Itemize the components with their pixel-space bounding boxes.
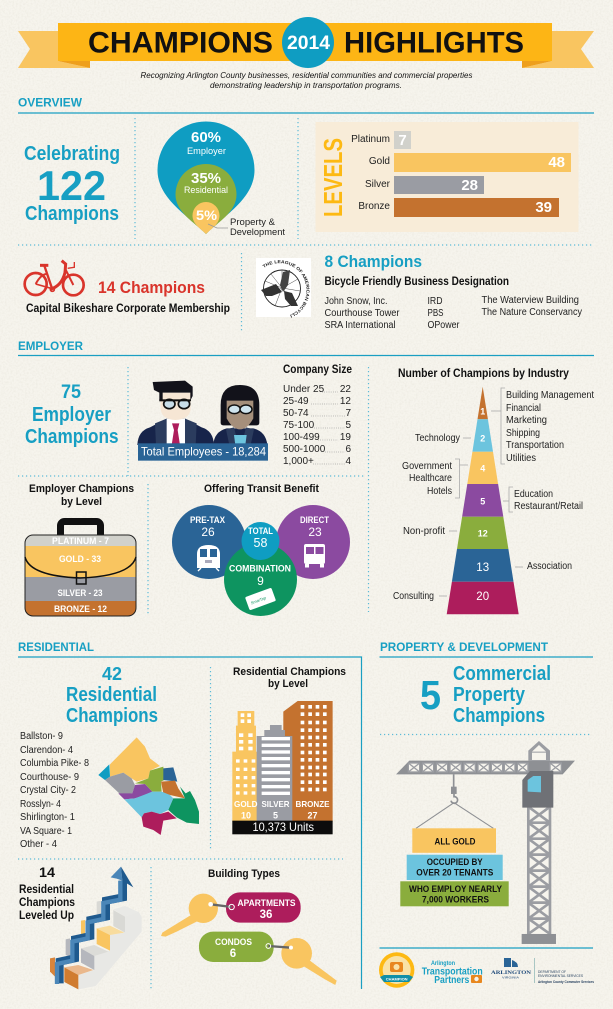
chart: champions by industry pyramid: Government <box>402 461 452 472</box>
icon: briefcase levels: SILVER - 23 <box>58 588 102 598</box>
residential neighborhoods list: Courthouse- 9 <box>20 772 79 783</box>
residential neighborhoods list: Other - 4 <box>20 839 57 850</box>
icon: briefcase levels: GOLD - 33 <box>59 554 101 564</box>
total employees label: Total Employees - 18,284 <box>141 444 266 458</box>
chart: champions by industry pyramid: 12 <box>478 528 488 538</box>
heading: residential <box>18 640 362 989</box>
nested teardrop chart <box>158 122 286 237</box>
14 residential champions leveled up <box>19 864 75 922</box>
icon: condos key and tag: 6 <box>230 948 236 960</box>
chart: offering transit benefit circles: COMBINATION <box>229 564 291 574</box>
chart: champions by industry pyramid: Consulting <box>393 591 434 602</box>
logo: champion badge <box>379 952 414 988</box>
logo: department of environmental services: DEPARTMENT OF <box>538 970 566 974</box>
chart: champions by industry pyramid: Education <box>514 489 553 500</box>
company size list: Under 25 <box>283 384 325 395</box>
residential neighborhoods list: Ballston- 9 <box>20 731 63 742</box>
panel: levels bar chart: Platinum <box>351 134 390 145</box>
celebrating 122 champions: 122 <box>37 162 106 209</box>
icon: bicycle friendly seal <box>256 258 311 318</box>
chart: champions by industry pyramid: Hotels <box>427 486 452 497</box>
panel: levels bar chart: 48 <box>548 154 565 171</box>
chart: offering transit benefit circles <box>172 483 350 616</box>
chart: champions by industry pyramid: Association <box>527 561 572 572</box>
logo: arlington virginia: VIRGINIA <box>502 976 519 980</box>
chart: champions by industry pyramid: 1 <box>480 406 485 416</box>
nested teardrop chart: 5% <box>196 207 218 223</box>
chart: champions by industry pyramid: Building Management <box>506 390 594 401</box>
celebrating 122 champions: Celebrating <box>24 143 120 165</box>
nested teardrop chart: Property & <box>230 217 275 227</box>
title banner: HIGHLIGHTS <box>344 26 524 60</box>
residential neighborhoods list <box>20 731 89 850</box>
panel: levels bar chart: 7 <box>398 132 407 149</box>
icon: red bicycle <box>25 261 84 295</box>
icon: briefcase levels: PLATINUM - 7 <box>52 536 109 546</box>
company size list: 500-1000 <box>283 444 326 455</box>
nested teardrop chart: Employer <box>187 146 226 157</box>
75 employer champions <box>25 382 118 448</box>
logo: arlington virginia <box>491 958 531 980</box>
logo: arlington transportation partners: Transportation <box>422 966 483 978</box>
heading: employer champions by level: Employer Champions <box>29 483 134 495</box>
chart: offering transit benefit circles: TOTAL <box>248 526 273 536</box>
14 residential champions leveled up: 14 <box>39 864 55 880</box>
chart: residential champions by level buildings <box>232 666 346 834</box>
chart: residential champions by level buildings: SILVER <box>262 799 290 809</box>
panel: levels bar chart: 28 <box>461 177 478 194</box>
stacked boxes: property facts: 7,000 WORKERS <box>422 894 489 904</box>
chart: champions by industry pyramid: Healthcare <box>409 473 452 484</box>
stacked boxes: property facts <box>400 828 509 906</box>
icon: apartments key and tag: APARTMENTS <box>238 898 296 908</box>
bicycle friendly business list: The Waterview Building <box>482 295 579 306</box>
residential neighborhoods list: Rosslyn- 4 <box>20 799 61 810</box>
bicycle friendly business list: SRA International <box>324 320 396 331</box>
nested teardrop chart: 60% <box>191 129 221 146</box>
residential neighborhoods list: Shirlington- 1 <box>20 812 75 823</box>
icon: apartments key and tag: 36 <box>260 909 272 921</box>
logo: arlington transportation partners: Partners <box>434 975 470 986</box>
stacked boxes: property facts: OCCUPIED BY <box>427 857 483 867</box>
icon: employees man and woman <box>137 381 268 461</box>
chart: residential champions by level buildings: by Level <box>268 678 308 690</box>
chart: offering transit benefit circles: 23 <box>308 525 322 539</box>
logo: champion badge: CHAMPION <box>386 976 408 982</box>
chart: champions by industry pyramid: Shipping <box>506 428 540 439</box>
chart: offering transit benefit circles: Offering Transit Benefit <box>204 483 319 495</box>
heading: employer champions by level <box>29 483 134 508</box>
chart: champions by industry pyramid: Technology <box>415 433 460 444</box>
heading: employer: EMPLOYER <box>18 339 83 353</box>
chart: residential champions by level buildings: 10,373 Units <box>252 820 314 834</box>
chart: champions by industry pyramid: Financial <box>506 403 541 414</box>
company size list: 100-499 <box>283 432 320 443</box>
logo: department of environmental services: ENVIRONMENTAL SERVICES <box>538 974 584 978</box>
chart: champions by industry pyramid: 5 <box>480 496 485 506</box>
bicycle friendly business list: IRD <box>428 296 442 307</box>
stacked boxes: property facts: ALL GOLD <box>434 836 476 846</box>
nested teardrop chart: 35% <box>191 170 221 187</box>
company size list <box>283 362 352 467</box>
map: arlington neighborhoods <box>98 737 199 835</box>
chart: offering transit benefit circles: 26 <box>201 525 215 539</box>
residential neighborhoods list: Crystal City- 2 <box>20 785 76 796</box>
capital bikeshare text: 14 Champions <box>98 278 205 297</box>
icon: apartments key and tag <box>161 892 301 937</box>
heading: property and development: PROPERTY & DEVELOPMENT <box>380 640 549 654</box>
bicycle friendly business list: 8 Champions <box>324 252 422 271</box>
icon: condos key and tag <box>199 932 337 985</box>
42 residential champions: 42 <box>102 664 122 684</box>
residential neighborhoods list: VA Square- 1 <box>20 826 72 837</box>
residential neighborhoods list: Clarendon- 4 <box>20 745 73 756</box>
company size list: 1,000+ <box>283 456 314 467</box>
nested teardrop chart: Residential <box>184 185 228 196</box>
14 residential champions leveled up: Residential <box>19 884 74 896</box>
bicycle friendly business list: The Nature Conservancy <box>482 307 582 318</box>
company size list: 12 <box>340 396 351 407</box>
icon: bicycle friendly seal: THE LEAGUE OF AMERICAN BICYCLISTS <box>262 260 310 318</box>
company size list: Company Size <box>283 362 352 376</box>
logo: department of environmental services: Arlington County Commuter Services <box>538 980 594 984</box>
capital bikeshare text <box>26 278 230 315</box>
75 employer champions: Champions <box>25 426 118 448</box>
heading: employer champions by level: by Level <box>61 496 102 508</box>
chart: champions by industry pyramid: Number of Champions by Industry <box>398 368 570 380</box>
company size list: 5 <box>345 420 351 431</box>
chart: champions by industry pyramid: Marketing <box>506 415 547 426</box>
14 residential champions leveled up: Leveled Up <box>19 910 74 922</box>
icon: condos key and tag: CONDOS <box>215 937 252 947</box>
chart: champions by industry pyramid <box>393 368 594 614</box>
title banner: 2014 <box>287 33 330 54</box>
icon: bus <box>304 544 325 568</box>
title banner: CHAMPIONS <box>88 26 273 60</box>
subtitle: demonstrating leadership in transportation programs. <box>210 80 402 90</box>
42 residential champions <box>66 664 158 727</box>
bicycle friendly business list: Courthouse Tower <box>324 308 400 319</box>
icon: briefcase levels <box>25 522 136 616</box>
75 employer champions: 75 <box>61 382 81 403</box>
capital bikeshare text: Capital Bikeshare Corporate Membership <box>26 303 230 315</box>
chart: residential champions by level buildings: Residential Champions <box>233 666 346 678</box>
14 residential champions leveled up: Champions <box>19 897 75 909</box>
bicycle friendly business list: Bicycle Friendly Business Designation <box>324 274 509 288</box>
stacked boxes: property facts: WHO EMPLOY NEARLY <box>409 884 502 894</box>
stacked boxes: property facts: OVER 20 TENANTS <box>416 868 493 878</box>
icon: crane <box>396 741 575 944</box>
75 employer champions: Employer <box>32 404 111 426</box>
title banner <box>18 17 594 68</box>
company size list: 7 <box>345 408 351 419</box>
chart: champions by industry pyramid: 2 <box>480 434 485 444</box>
subtitle <box>140 70 473 90</box>
celebrating 122 champions <box>24 143 120 225</box>
bicycle friendly business list: OPower <box>428 320 460 331</box>
panel: levels bar chart: LEVELS <box>318 138 348 217</box>
heading: residential: RESIDENTIAL <box>18 640 94 654</box>
chart: champions by industry pyramid: 4 <box>480 464 485 474</box>
panel: levels bar chart: Bronze <box>358 201 390 212</box>
subtitle: Recognizing Arlington County businesses, residential communities and commercial properties <box>140 70 473 80</box>
logo: department of environmental services <box>534 958 594 984</box>
42 residential champions: Residential <box>66 684 157 706</box>
bicycle friendly business list <box>324 252 582 331</box>
logo: arlington transportation partners: Arlington <box>431 960 455 967</box>
chart: residential champions by level buildings: 5 <box>273 810 278 820</box>
5 commercial property champions: Champions <box>453 705 545 727</box>
bicycle friendly business list: John Snow, Inc. <box>324 296 388 307</box>
chart: champions by industry pyramid: 13 <box>476 562 489 574</box>
company size list: 50-74 <box>283 408 309 419</box>
company size list: 25-49 <box>283 396 309 407</box>
nested teardrop chart: Development <box>230 227 286 237</box>
42 residential champions: Champions <box>66 705 158 727</box>
heading: building types: Building Types <box>208 868 280 880</box>
chart: champions by industry pyramid: Transportation <box>506 440 564 451</box>
chart: champions by industry pyramid: 20 <box>476 591 489 603</box>
company size list: 6 <box>345 444 351 455</box>
logo: arlington virginia: ARLINGTON <box>491 970 531 976</box>
chart: residential champions by level buildings: 10 <box>241 810 251 820</box>
company size list: 75-100 <box>283 420 315 431</box>
icon: briefcase levels: BRONZE - 12 <box>54 604 107 614</box>
chart: offering transit benefit circles: 9 <box>257 574 264 588</box>
chart: champions by industry pyramid: Restaurant/Retail <box>514 501 583 512</box>
panel: levels bar chart: Silver <box>365 179 391 190</box>
icon: stairs with rising arrow <box>50 867 142 989</box>
chart: residential champions by level buildings: 27 <box>307 810 318 820</box>
panel: levels bar chart: Gold <box>369 156 390 167</box>
company size list: 19 <box>340 432 351 443</box>
company size list: 22 <box>340 384 351 395</box>
5 commercial property champions <box>420 663 551 727</box>
company size list: 4 <box>345 456 351 467</box>
chart: champions by industry pyramid: Utilities <box>506 453 536 464</box>
chart: residential champions by level buildings: BRONZE <box>296 799 330 809</box>
heading: overview: OVERVIEW <box>18 96 83 110</box>
5 commercial property champions: Property <box>453 684 526 706</box>
celebrating 122 champions: Champions <box>25 203 119 225</box>
logo: arlington transportation partners <box>422 960 483 986</box>
chart: offering transit benefit circles: DIRECT <box>300 515 329 525</box>
icon: train <box>197 545 220 571</box>
5 commercial property champions: Commercial <box>453 663 551 685</box>
chart: residential champions by level buildings: GOLD <box>234 799 258 809</box>
chart: offering transit benefit circles: PRE-TAX <box>190 515 225 525</box>
icon: smartrip card: SmarTrip <box>250 595 268 605</box>
5 commercial property champions: 5 <box>420 672 441 718</box>
panel: levels bar chart: 39 <box>535 199 552 216</box>
bicycle friendly business list: PBS <box>428 308 444 319</box>
chart: champions by industry pyramid: Non-profit <box>403 526 445 537</box>
icon: smartrip card <box>245 588 276 610</box>
chart: offering transit benefit circles: 58 <box>254 536 267 550</box>
residential neighborhoods list: Columbia Pike- 8 <box>20 758 89 769</box>
panel: levels bar chart <box>316 122 578 232</box>
